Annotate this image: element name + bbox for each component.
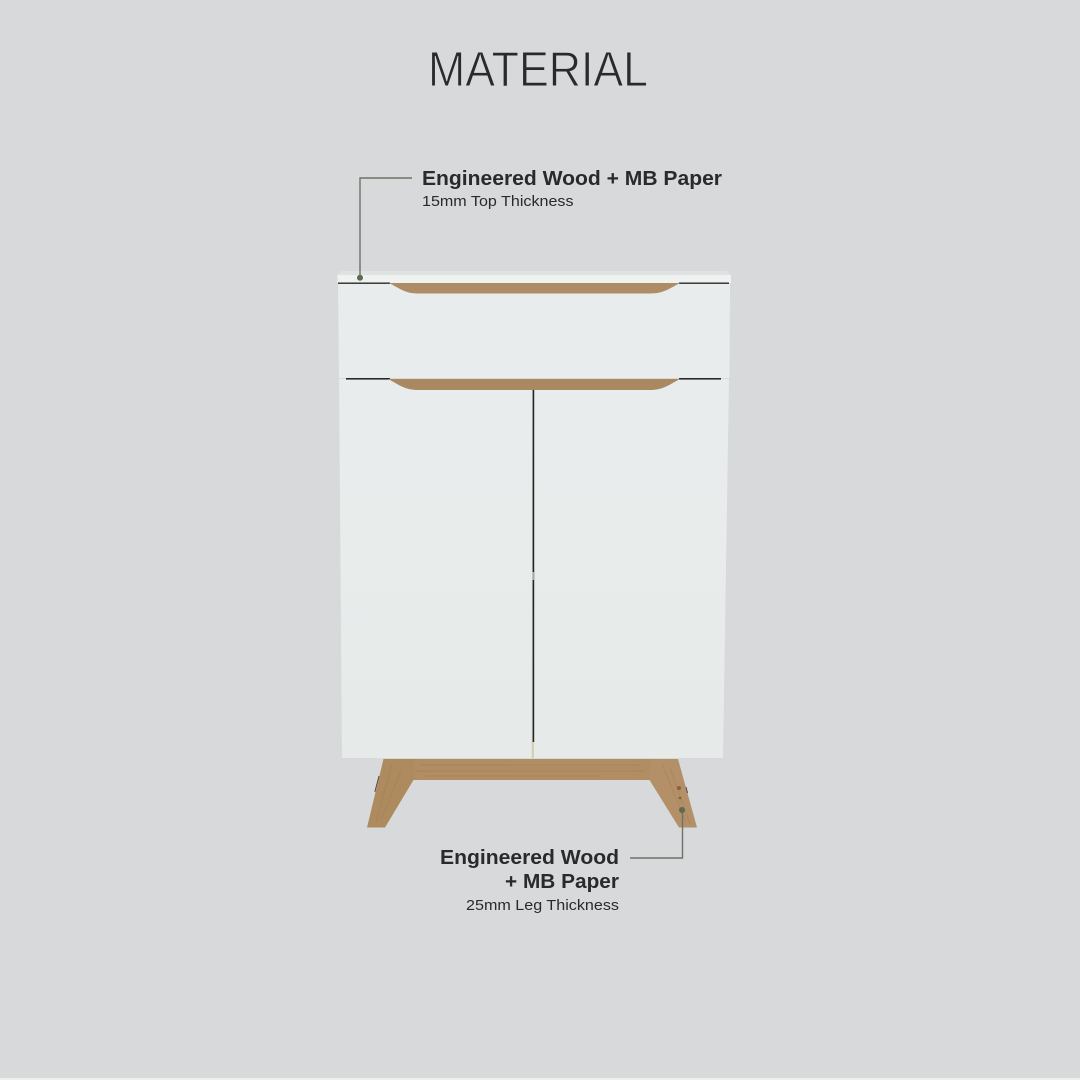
callout heading: + MB Paper — [505, 871, 619, 893]
leader line — [630, 810, 682, 858]
door gap and drawer gap — [346, 378, 721, 758]
callout heading: Engineered Wood — [440, 847, 619, 869]
callout: leg material — [440, 807, 685, 914]
wooden base — [367, 759, 697, 828]
left door — [339, 379, 532, 758]
title: MATERIAL — [428, 43, 648, 97]
callout: top material — [357, 168, 722, 281]
callout subtext: 25mm Leg Thickness — [466, 897, 619, 914]
drawer wood handle — [389, 283, 680, 294]
leader dot — [357, 275, 363, 281]
base rail — [412, 759, 652, 780]
left leg — [367, 759, 414, 828]
cabinet illustration — [337, 271, 731, 828]
drawer front — [338, 282, 730, 378]
callout heading — [440, 847, 619, 893]
right door — [534, 379, 729, 758]
leader dot — [679, 807, 685, 813]
right leg — [650, 759, 697, 828]
cabinet top panel — [337, 271, 731, 283]
leader line — [360, 178, 412, 278]
callout heading: Engineered Wood + MB Paper — [422, 168, 722, 190]
door wood handle — [388, 379, 680, 390]
callout subtext: 15mm Top Thickness — [422, 193, 574, 210]
